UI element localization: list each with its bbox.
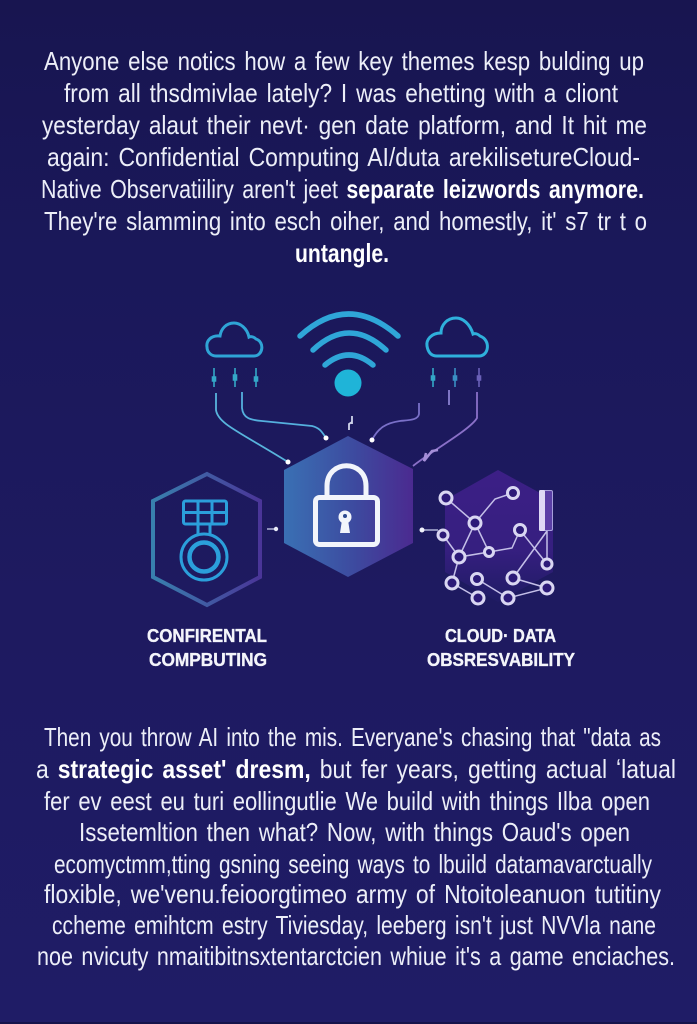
icon: vertical bar [539,490,552,531]
network links [443,493,547,598]
icon: left cloud [207,323,262,356]
bottom edge line [0,1022,697,1024]
label: right hexagon: CLOUD· DATA [445,626,556,646]
connector: left hexagon to centre [267,527,278,531]
icon: wifi signal [300,314,398,396]
label: right hexagon: OBSRESVABILITY [427,650,575,670]
network nodes [438,488,553,604]
label: right hexagon [427,626,575,670]
icon: chip grid [183,501,227,534]
icon: right small arrows [432,368,480,387]
connector lines to central hexagon [216,390,477,466]
label: left hexagon: COMPBUTING [149,650,267,670]
closing paragraph [36,722,676,971]
central hexagon with padlock [284,436,413,577]
icon: left small arrows [212,368,258,387]
icon: right cloud [427,318,487,356]
label: left hexagon: CONFIRENTAL [147,626,267,646]
intro paragraph [41,46,647,268]
icon: ring [181,534,227,580]
connector: centre to network [420,528,438,532]
diagram [153,314,553,605]
intro paragraph: Native Observatiiliry aren't jeet separate leizwords anymore. [41,174,644,204]
icon: padlock [316,466,378,544]
intro paragraph: untangle. [295,238,389,268]
right hexagon with network graph [438,470,553,604]
left hexagon with chip and ring icon [153,474,260,605]
label: left hexagon [147,626,267,670]
intro paragraph: from all thsdmivlae lately? I was ehetting with a cliont [64,78,619,108]
